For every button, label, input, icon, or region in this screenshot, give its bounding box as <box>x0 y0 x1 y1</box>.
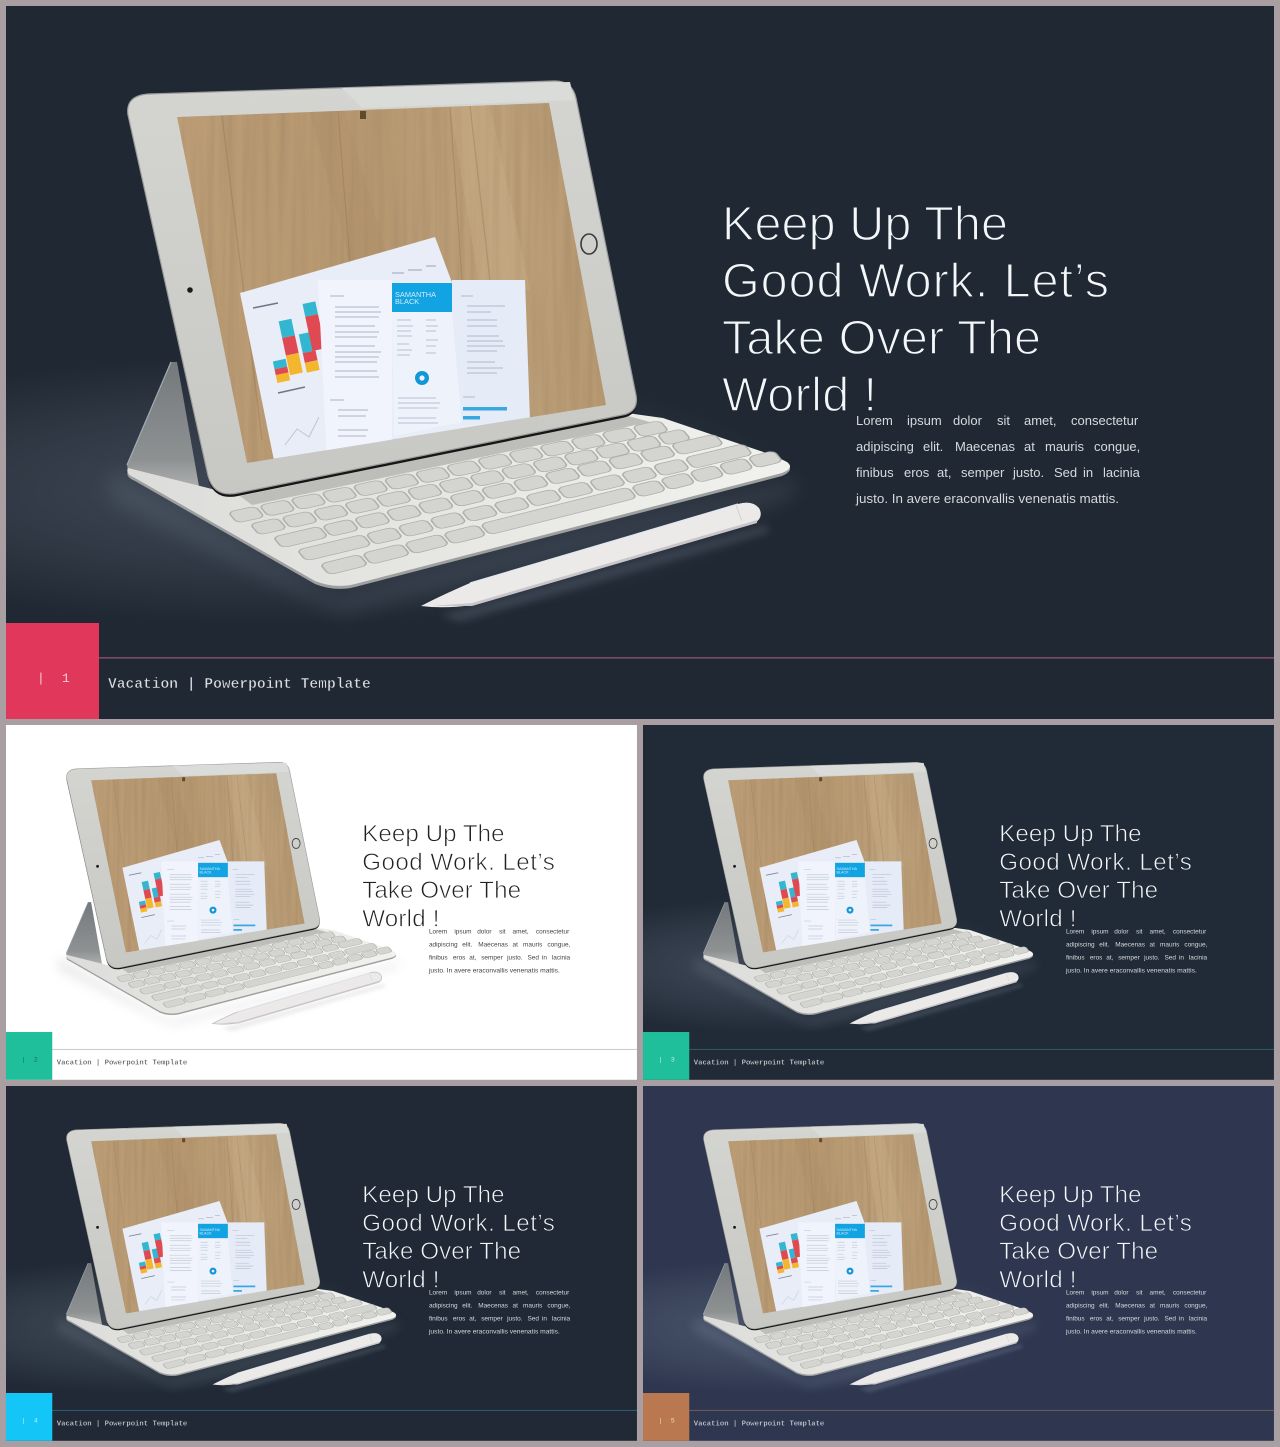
body text: amet, <box>1150 1289 1166 1296</box>
body text: at, <box>1106 954 1114 961</box>
panel: small dark slide 3 <box>643 725 1274 1080</box>
body text: consectetur <box>1173 928 1207 935</box>
icon: stylus <box>212 972 382 1024</box>
body text: at, <box>1106 1315 1114 1322</box>
body text: at <box>1024 439 1035 454</box>
body text: adipiscing <box>1066 1302 1095 1309</box>
body text: eros <box>453 954 465 961</box>
icon: stylus <box>212 1333 382 1385</box>
body text: Lorem <box>429 928 447 935</box>
body text: amet, <box>513 928 529 935</box>
body text: Lorem <box>1066 1289 1084 1296</box>
body text: justo. In avere eraconvallis venenatis mattis. <box>1065 967 1197 974</box>
body text: Lorem <box>856 413 893 428</box>
title: Keep Up The <box>999 1181 1142 1208</box>
device reflection glow <box>695 956 1038 1032</box>
body text: Maecenas <box>1115 941 1145 948</box>
panel: large dark slide 1 <box>6 6 1274 719</box>
title: Good Work. Let’s <box>722 254 1109 308</box>
body text: justo. <box>506 954 523 961</box>
slide background <box>643 725 1274 1080</box>
body text: dolor <box>1114 1289 1129 1296</box>
body text: Sed <box>527 1315 539 1322</box>
page number: | <box>658 1417 662 1424</box>
body text: congue, <box>1094 439 1140 454</box>
body text: amet, <box>1150 928 1166 935</box>
icon: keyboard <box>703 1288 1033 1376</box>
device reflection glow <box>110 470 800 622</box>
body text: at <box>1150 941 1155 948</box>
footer line <box>689 1409 1274 1412</box>
title: Take Over The <box>362 1238 521 1265</box>
body text: consectetur <box>536 928 570 935</box>
page number: | <box>21 1056 25 1063</box>
body text: at, <box>469 954 477 961</box>
body text: at, <box>469 1315 477 1322</box>
icon: tablet <box>67 1123 320 1334</box>
body text: Sed <box>1054 465 1077 480</box>
footer text: Vacation | Powerpoint Template <box>57 1420 187 1428</box>
title <box>362 1181 555 1294</box>
title: World ! <box>362 906 439 933</box>
icon: tablet <box>704 1123 957 1334</box>
body text: in <box>542 1315 547 1322</box>
slide background <box>6 725 637 1080</box>
page number block <box>6 1032 52 1080</box>
icon: keyboard <box>66 927 396 1015</box>
icon: stylus <box>421 503 761 607</box>
footer text: Vacation | Powerpoint Template <box>694 1059 824 1067</box>
device reflection glow <box>695 1317 1038 1393</box>
resume name: SAMANTHA <box>395 290 436 299</box>
body text: at <box>513 1302 518 1309</box>
resume name: BLACK <box>200 1231 212 1235</box>
background glow <box>6 1232 504 1401</box>
body text: justo. <box>1143 1315 1160 1322</box>
body text: in <box>542 954 547 961</box>
title: Take Over The <box>722 311 1041 365</box>
body text: finibus <box>1066 954 1085 961</box>
background glow <box>643 871 1141 1040</box>
background glow <box>643 1232 1141 1401</box>
body text: dolor <box>477 928 492 935</box>
body text: lacinia <box>552 1315 571 1322</box>
body text: ipsum <box>454 1289 472 1296</box>
body text: mauris <box>1160 941 1179 948</box>
body text: congue, <box>1184 941 1208 948</box>
title: World ! <box>999 906 1076 933</box>
body text: consectetur <box>536 1289 570 1296</box>
body text: lacinia <box>1189 954 1208 961</box>
body text: justo. <box>1012 465 1044 480</box>
title: Take Over The <box>999 1238 1158 1265</box>
title: Keep Up The <box>362 1181 505 1208</box>
icon: keyboard <box>66 1288 396 1376</box>
resume name: SAMANTHA <box>837 1228 857 1232</box>
body text: justo. <box>506 1315 523 1322</box>
footer line <box>52 1409 637 1412</box>
title: Take Over The <box>999 877 1158 904</box>
body text: semper <box>961 465 1005 480</box>
title <box>722 197 1109 422</box>
body text: justo. In avere eraconvallis venenatis mattis. <box>855 491 1119 506</box>
icon: keyboard <box>127 412 790 589</box>
resume name: SAMANTHA <box>837 867 857 871</box>
body text: finibus <box>429 954 448 961</box>
body text: semper <box>1118 1315 1141 1322</box>
page number: 4 <box>34 1417 38 1424</box>
body text: eros <box>904 465 930 480</box>
icon: tablet <box>128 81 636 505</box>
body text: congue, <box>547 1302 571 1309</box>
body text: eros <box>453 1315 465 1322</box>
title: Take Over The <box>362 877 521 904</box>
body text: elit. <box>1099 1302 1110 1309</box>
page number block <box>6 1393 52 1441</box>
body text: consectetur <box>1071 413 1139 428</box>
body text: sit <box>997 413 1010 428</box>
icon: tablet <box>67 762 320 973</box>
body text: ipsum <box>454 928 472 935</box>
panel: small white slide 2 <box>6 725 637 1080</box>
page number block <box>643 1393 689 1441</box>
body text: Lorem <box>429 1289 447 1296</box>
title: Good Work. Let’s <box>999 1210 1192 1237</box>
body text: ipsum <box>907 413 942 428</box>
body text: amet, <box>513 1289 529 1296</box>
slide background <box>6 1086 637 1441</box>
title: Good Work. Let’s <box>999 849 1192 876</box>
body text: Sed <box>1164 1315 1176 1322</box>
body text: at <box>1150 1302 1155 1309</box>
body text: dolor <box>477 1289 492 1296</box>
icon: folio stand <box>127 362 200 492</box>
title: World ! <box>999 1267 1076 1294</box>
body text: lacinia <box>1103 465 1141 480</box>
resume name: BLACK <box>837 870 849 874</box>
page number: 3 <box>671 1056 675 1063</box>
body text: elit. <box>1099 941 1110 948</box>
body text: elit. <box>923 439 943 454</box>
page number block <box>6 623 99 719</box>
body text: eros <box>1090 1315 1102 1322</box>
body text: at, <box>937 465 951 480</box>
body text: adipiscing <box>429 1302 458 1309</box>
body text: semper <box>481 1315 504 1322</box>
page number: | <box>37 671 45 686</box>
resume name: SAMANTHA <box>200 1228 220 1232</box>
title: Keep Up The <box>722 197 1008 251</box>
page number: | <box>21 1417 25 1424</box>
panel: small navy slide 5 <box>643 1086 1274 1441</box>
title <box>999 820 1192 933</box>
body text: Sed <box>527 954 539 961</box>
icon: stylus <box>849 972 1019 1024</box>
body text: adipiscing <box>856 439 914 454</box>
body text: semper <box>1118 954 1141 961</box>
device soft shadow <box>58 956 401 1032</box>
body text: elit. <box>462 1302 473 1309</box>
body text: sit <box>1136 928 1143 935</box>
title: Keep Up The <box>362 820 505 847</box>
panel: small dark slide 4 <box>6 1086 637 1441</box>
body text: elit. <box>462 941 473 948</box>
body text: justo. <box>1143 954 1160 961</box>
resume name: BLACK <box>837 1231 849 1235</box>
footer text: Vacation | Powerpoint Template <box>694 1420 824 1428</box>
body text: eros <box>1090 954 1102 961</box>
body text: justo. In avere eraconvallis venenatis mattis. <box>1065 1328 1197 1335</box>
body text: in <box>1083 465 1093 480</box>
body text: dolor <box>953 413 983 428</box>
body text: ipsum <box>1091 1289 1109 1296</box>
body text: mauris <box>523 941 542 948</box>
icon: stylus <box>849 1333 1019 1385</box>
title: World ! <box>722 368 877 422</box>
resume name: BLACK <box>200 870 212 874</box>
body text: sit <box>499 928 506 935</box>
footer line <box>689 1048 1274 1051</box>
body text: semper <box>481 954 504 961</box>
body text: sit <box>499 1289 506 1296</box>
body text: Lorem <box>1066 928 1084 935</box>
title: Good Work. Let’s <box>362 849 555 876</box>
body text: Maecenas <box>478 1302 508 1309</box>
device reflection glow <box>58 1317 401 1393</box>
body text: finibus <box>856 465 894 480</box>
body text: congue, <box>1184 1302 1208 1309</box>
page number: 1 <box>62 671 70 686</box>
body text: adipiscing <box>429 941 458 948</box>
body text: justo. In avere eraconvallis venenatis mattis. <box>428 967 560 974</box>
icon: tablet <box>704 762 957 973</box>
body text: justo. In avere eraconvallis venenatis mattis. <box>428 1328 560 1335</box>
body text: consectetur <box>1173 1289 1207 1296</box>
icon: folio stand <box>66 1263 103 1328</box>
body text: congue, <box>547 941 571 948</box>
body text: finibus <box>1066 1315 1085 1322</box>
slide background <box>643 1086 1274 1441</box>
body text: amet, <box>1024 413 1057 428</box>
body text: mauris <box>1160 1302 1179 1309</box>
footer line <box>99 657 1274 659</box>
body text: mauris <box>523 1302 542 1309</box>
icon: keyboard <box>703 927 1033 1015</box>
icon: folio stand <box>703 902 740 967</box>
title <box>362 820 555 933</box>
page number block <box>643 1032 689 1080</box>
body text: at <box>513 941 518 948</box>
footer line <box>52 1048 637 1051</box>
body text: dolor <box>1114 928 1129 935</box>
title <box>999 1181 1192 1294</box>
body text: in <box>1179 954 1184 961</box>
body text: lacinia <box>1189 1315 1208 1322</box>
icon: folio stand <box>66 902 103 967</box>
footer text: Vacation | Powerpoint Template <box>57 1059 187 1067</box>
body text: adipiscing <box>1066 941 1095 948</box>
body text: ipsum <box>1091 928 1109 935</box>
body text: Maecenas <box>1115 1302 1145 1309</box>
title: Keep Up The <box>999 820 1142 847</box>
footer text: Vacation | Powerpoint Template <box>108 677 371 693</box>
page number: 5 <box>671 1417 675 1424</box>
resume name: SAMANTHA <box>200 867 220 871</box>
body text: Maecenas <box>955 439 1015 454</box>
title: World ! <box>362 1267 439 1294</box>
page number: | <box>658 1056 662 1063</box>
page number: 2 <box>34 1056 38 1063</box>
body text: lacinia <box>552 954 571 961</box>
resume name: BLACK <box>395 297 419 306</box>
body text: finibus <box>429 1315 448 1322</box>
body text: Maecenas <box>478 941 508 948</box>
title: Good Work. Let’s <box>362 1210 555 1237</box>
icon: folio stand <box>703 1263 740 1328</box>
background glow <box>6 300 1006 640</box>
body text: sit <box>1136 1289 1143 1296</box>
body text: mauris <box>1045 439 1085 454</box>
body text: in <box>1179 1315 1184 1322</box>
slide background <box>6 6 1274 719</box>
body text: Sed <box>1164 954 1176 961</box>
